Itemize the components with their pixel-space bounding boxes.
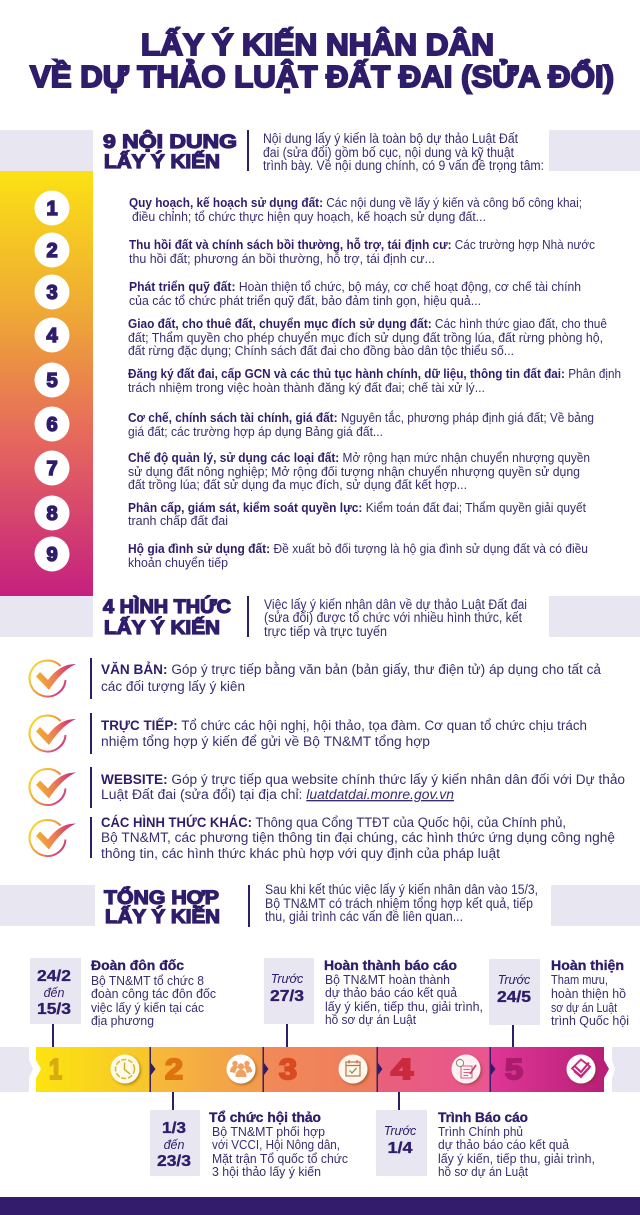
date box	[489, 959, 540, 1047]
text	[551, 957, 629, 1028]
form: các hình thức khác: Bộ TN&MT, các phương tiện thông tin đại chúng, các hình thức ứng dụng công nghệ	[101, 830, 615, 845]
text: Đoàn đôn đốc	[91, 957, 184, 973]
section header: 4 hình thức	[0, 594, 640, 639]
section header: 9 nội dung: LẤY Ý KIẾN	[104, 149, 220, 173]
section header: tổng hợp: thu, giải trình các vấn đề liên quan...	[265, 909, 463, 924]
number 1	[34, 190, 70, 226]
icon: check	[30, 769, 76, 805]
number 5: 5	[46, 370, 58, 392]
form: website: Luật Đất đai (sửa đổi) tại địa chỉ: luatdatdai.monre.gov.vn	[101, 787, 454, 802]
item 5: trách nhiệm trong việc hoàn thành đăng ký đất đai; chế tài xử lý...	[128, 381, 485, 395]
form: trực tiếp: TRỰC TIẾP: Tổ chức các hội nghị, hội thảo, tọa đàm. Cơ quan tổ chức chịu trách	[101, 718, 587, 733]
item 8: Phân cấp, giám sát, kiểm soát quyền lực: Kiểm toán đất đai; Thẩm quyền giải quyết	[128, 501, 586, 515]
number 2	[34, 232, 70, 268]
gradient column with numbers	[0, 171, 93, 596]
item 1: điều chỉnh; tổ chức thực hiện quy hoạch, kế hoạch sử dụng đất...	[132, 210, 486, 224]
item 6: giá đất; các trường hợp áp dụng Bảng giá đất...	[128, 425, 383, 439]
text	[324, 957, 483, 1027]
item 4: đất rừng đặc dụng; Chính sách đất đai cho đồng bào dân tộc thiểu số...	[128, 344, 514, 358]
date box: 15/3	[37, 1001, 71, 1018]
item 3	[129, 280, 581, 308]
text: Mặt trận Tổ quốc tổ chức	[212, 1152, 348, 1166]
section header: tổng hợp: TỔNG HỢP	[104, 885, 219, 909]
date box: 1/3	[162, 1120, 186, 1137]
icon: clock	[110, 1054, 140, 1084]
date box: Trước	[384, 1124, 417, 1138]
text: dự thảo báo cáo kết quả	[438, 1138, 569, 1152]
date box: 23/3	[157, 1153, 191, 1170]
text: sơ dự án Luật	[551, 1001, 617, 1015]
date box	[264, 958, 314, 1047]
item 2: Thu hồi đất và chính sách bồi thường, hỗ trợ, tái định cư: Các trường hợp Nhà nước	[129, 237, 595, 252]
text: lấy ý kiến, tiếp thu, giải trình,	[438, 1152, 595, 1166]
step numbers: 4	[391, 1054, 413, 1086]
section header: tổng hợp	[0, 882, 640, 928]
step numbers	[49, 1054, 523, 1086]
section header: tổng hợp: Bộ TN&MT có trách nhiệm tổng hợp kết quả, tiếp	[265, 896, 533, 911]
section header: tổng hợp: LẤY Ý KIẾN	[105, 904, 220, 928]
date box	[30, 958, 81, 1047]
text: Bộ TN&MT tổ chức 8	[91, 974, 204, 988]
item 2: thu hồi đất; phương án bồi thường, hỗ trợ, tái định cư...	[129, 251, 435, 266]
text: việc lấy ý kiến tại các	[91, 1001, 204, 1015]
date box: 24/5	[497, 989, 531, 1006]
text: dự thảo báo cáo kết quả	[325, 986, 457, 1000]
number 5	[34, 362, 70, 398]
item 1: Quy hoạch, kế hoạch sử dụng đất: Các nội dung về lấy ý kiến và công bố công khai;	[129, 196, 582, 210]
section header: 4 hình thức: trực tiếp và trực tuyến	[264, 624, 387, 639]
section header: 9 nội dung	[0, 129, 640, 173]
number 3: 3	[46, 282, 58, 304]
step numbers: 1	[49, 1054, 62, 1086]
form: văn bản: VĂN BẢN: Góp ý trực tiếp bằng văn bản (bản giấy, thư điện tử) áp dụng cho tất cả	[101, 662, 601, 677]
form: văn bản	[30, 658, 601, 699]
number 6: 6	[46, 414, 58, 436]
item 4: đất; Thẩm quyền cho phép chuyển mục đích sử dụng đất trồng lúa, đất rừng phòng hộ,	[128, 331, 603, 345]
date box: 24/2	[37, 968, 71, 985]
text: Trình Báo cáo	[438, 1109, 528, 1125]
text	[91, 957, 216, 1028]
form: trực tiếp	[30, 713, 587, 754]
form: các hình thức khác: thông tin, các hình thức khác phù hợp với quy định của pháp luật	[101, 846, 500, 861]
timeline bar	[0, 1047, 640, 1092]
section header: tổng hợp: Sau khi kết thúc việc lấy ý kiến nhân dân vào 15/3,	[265, 882, 538, 897]
text: Bộ TN&MT phối hợp	[212, 1125, 325, 1139]
text: Bộ TN&MT hoàn thành	[325, 973, 450, 987]
date box: 1/4	[388, 1140, 413, 1157]
text: hồ sơ dự án Luật	[325, 1013, 416, 1027]
number 8	[34, 496, 70, 530]
item 8	[128, 501, 586, 528]
item 2	[129, 237, 595, 266]
title	[30, 26, 614, 94]
text: Hoàn thành báo cáo	[324, 957, 457, 973]
section header: 4 hình thức: (sửa đổi) được tổ chức với nhiều hình thức, kết	[264, 610, 522, 625]
item 9: khoản chuyển tiếp	[128, 556, 228, 570]
text: trình Quốc hội	[551, 1014, 629, 1028]
item 8: tranh chấp đất đai	[128, 514, 228, 528]
number 9	[34, 536, 70, 572]
number 4	[34, 318, 70, 352]
item 9	[128, 542, 588, 570]
item 4	[128, 317, 607, 358]
item 7: Chế độ quản lý, sử dụng các loại đất: Mở rộng hạn mức nhận chuyển nhượng quyền	[128, 451, 590, 465]
text: Tổ chức hội thảo	[209, 1109, 321, 1125]
number 9: 9	[46, 544, 58, 566]
date box	[150, 1092, 200, 1176]
form: văn bản: các đối tượng lấy ý kiên	[101, 679, 245, 694]
step numbers: 5	[505, 1054, 523, 1086]
section header: 4 hình thức: LẤY Ý KIẾN	[104, 615, 220, 639]
icon: people	[226, 1054, 256, 1084]
step numbers: 2	[165, 1054, 183, 1086]
item 1	[129, 196, 582, 224]
icon: check	[30, 716, 76, 752]
section header: 9 nội dung: đai (sửa đổi) gồm bố cục, nội dung và kỹ thuật	[263, 145, 514, 160]
footer band	[0, 1197, 640, 1215]
form: các hình thức khác: CÁC HÌNH THỨC KHÁC: Thông qua Cổng TTĐT của Quốc hội, của Chính phủ,	[101, 815, 566, 830]
number 6	[34, 406, 70, 442]
number 1: 1	[46, 198, 58, 220]
step 2: tổ chức hội thảo	[150, 1092, 348, 1179]
section header: 9 nội dung: 9 NỘI DUNG	[103, 129, 237, 153]
text: đoàn công tác đôn đốc	[91, 987, 216, 1001]
item 6: Cơ chế, chính sách tài chính, giá đất: Nguyên tắc, phương pháp định giá đất; Về bảng	[128, 410, 594, 425]
number 4: 4	[46, 325, 58, 347]
item 3: Phát triển quỹ đất: Hoàn thiện tổ chức, bộ máy, cơ chế hoạt động, cơ chế tài chính	[129, 280, 581, 294]
section header: 9 nội dung: trình bày. Về nội dung chính, có 9 vấn đề trọng tâm:	[263, 158, 544, 173]
form: các hình thức khác	[30, 815, 615, 861]
item 7	[128, 451, 590, 492]
icon: calendar	[338, 1054, 368, 1084]
title: VỀ DỰ THẢO LUẬT ĐẤT ĐAI (SỬA ĐỔI)	[30, 58, 614, 94]
form: trực tiếp: nhiệm tổng hợp ý kiến để gửi về Bộ TN&MT tổng hợp	[101, 734, 430, 749]
step 3: hoàn thành báo cáo	[264, 957, 483, 1047]
date box: Trước	[498, 973, 531, 987]
step 4: trình báo cáo	[376, 1092, 595, 1179]
number 2: 2	[46, 240, 58, 262]
text: 3 hội thảo lấy ý kiến	[212, 1165, 321, 1179]
icon: double check	[566, 1054, 596, 1084]
item 3: của các tổ chức phát triển quỹ đất, bảo đảm tinh gọn, hiệu quả...	[129, 294, 481, 308]
date box: Trước	[271, 972, 304, 986]
date box: đến	[164, 1138, 184, 1152]
item 7: đất trồng lúa; đất sử dụng đa mục đích, sử dụng đất kết hợp...	[128, 478, 467, 492]
number 7: 7	[46, 458, 58, 480]
section header: 9 nội dung: Nội dung lấy ý kiến là toàn bộ dự thảo Luật Đất	[263, 131, 518, 146]
title: LẤY Ý KIẾN NHÂN DÂN	[141, 26, 494, 62]
form: website: WEBSITE: Góp ý trực tiếp qua website chính thức lấy ý kiến nhân dân đối với Dự thảo	[101, 772, 625, 787]
item 6	[128, 410, 594, 439]
date box	[376, 1092, 427, 1176]
text: Tham mưu,	[551, 973, 608, 987]
item 9: Hộ gia đình sử dụng đất: Đề xuất bỏ đối tượng là hộ gia đình sử dụng đất và có điều	[128, 542, 588, 556]
step 5: hoàn thiện	[489, 957, 629, 1047]
form: website	[30, 767, 625, 808]
text: với VCCI, Hội Nông dân,	[212, 1138, 340, 1152]
item 7: sử dụng đất nông nghiệp; Mở rộng đối tượng nhận chuyển nhượng quyền sử dụng	[128, 465, 580, 479]
text: Trình Chính phủ	[438, 1125, 523, 1139]
step numbers: 3	[279, 1054, 297, 1086]
number 8: 8	[46, 503, 58, 525]
item 5: Đăng ký đất đai, cấp GCN và các thủ tục hành chính, dữ liệu, thông tin đất đai: Phân định	[128, 367, 621, 381]
text	[438, 1109, 595, 1179]
icon: check	[30, 661, 76, 697]
number 3	[34, 274, 70, 310]
section header: 4 hình thức: 4 HÌNH THỨC	[103, 594, 231, 618]
date box: đến	[44, 986, 64, 1000]
date box: 27/3	[270, 988, 304, 1005]
section header: 4 hình thức: Việc lấy ý kiến nhân dân về dự thảo Luật Đất đai	[264, 597, 527, 612]
text: Hoàn thiện	[551, 957, 624, 973]
icon: check	[30, 820, 76, 856]
text	[209, 1109, 348, 1179]
icon: document	[452, 1054, 480, 1084]
text: lấy ý kiến, tiếp thu, giải trình,	[325, 1000, 483, 1014]
item 4: Giao đất, cho thuê đất, chuyển mục đích sử dụng đất: Các hình thức giao đất, cho thuê	[128, 317, 607, 331]
text: hồ sơ dự án Luật	[438, 1165, 528, 1179]
number 7	[34, 450, 70, 486]
text: hoàn thiện hồ	[551, 987, 626, 1001]
item 5	[128, 367, 621, 395]
step 1: đoàn đôn đốc	[30, 957, 216, 1047]
text: địa phương	[91, 1014, 154, 1028]
